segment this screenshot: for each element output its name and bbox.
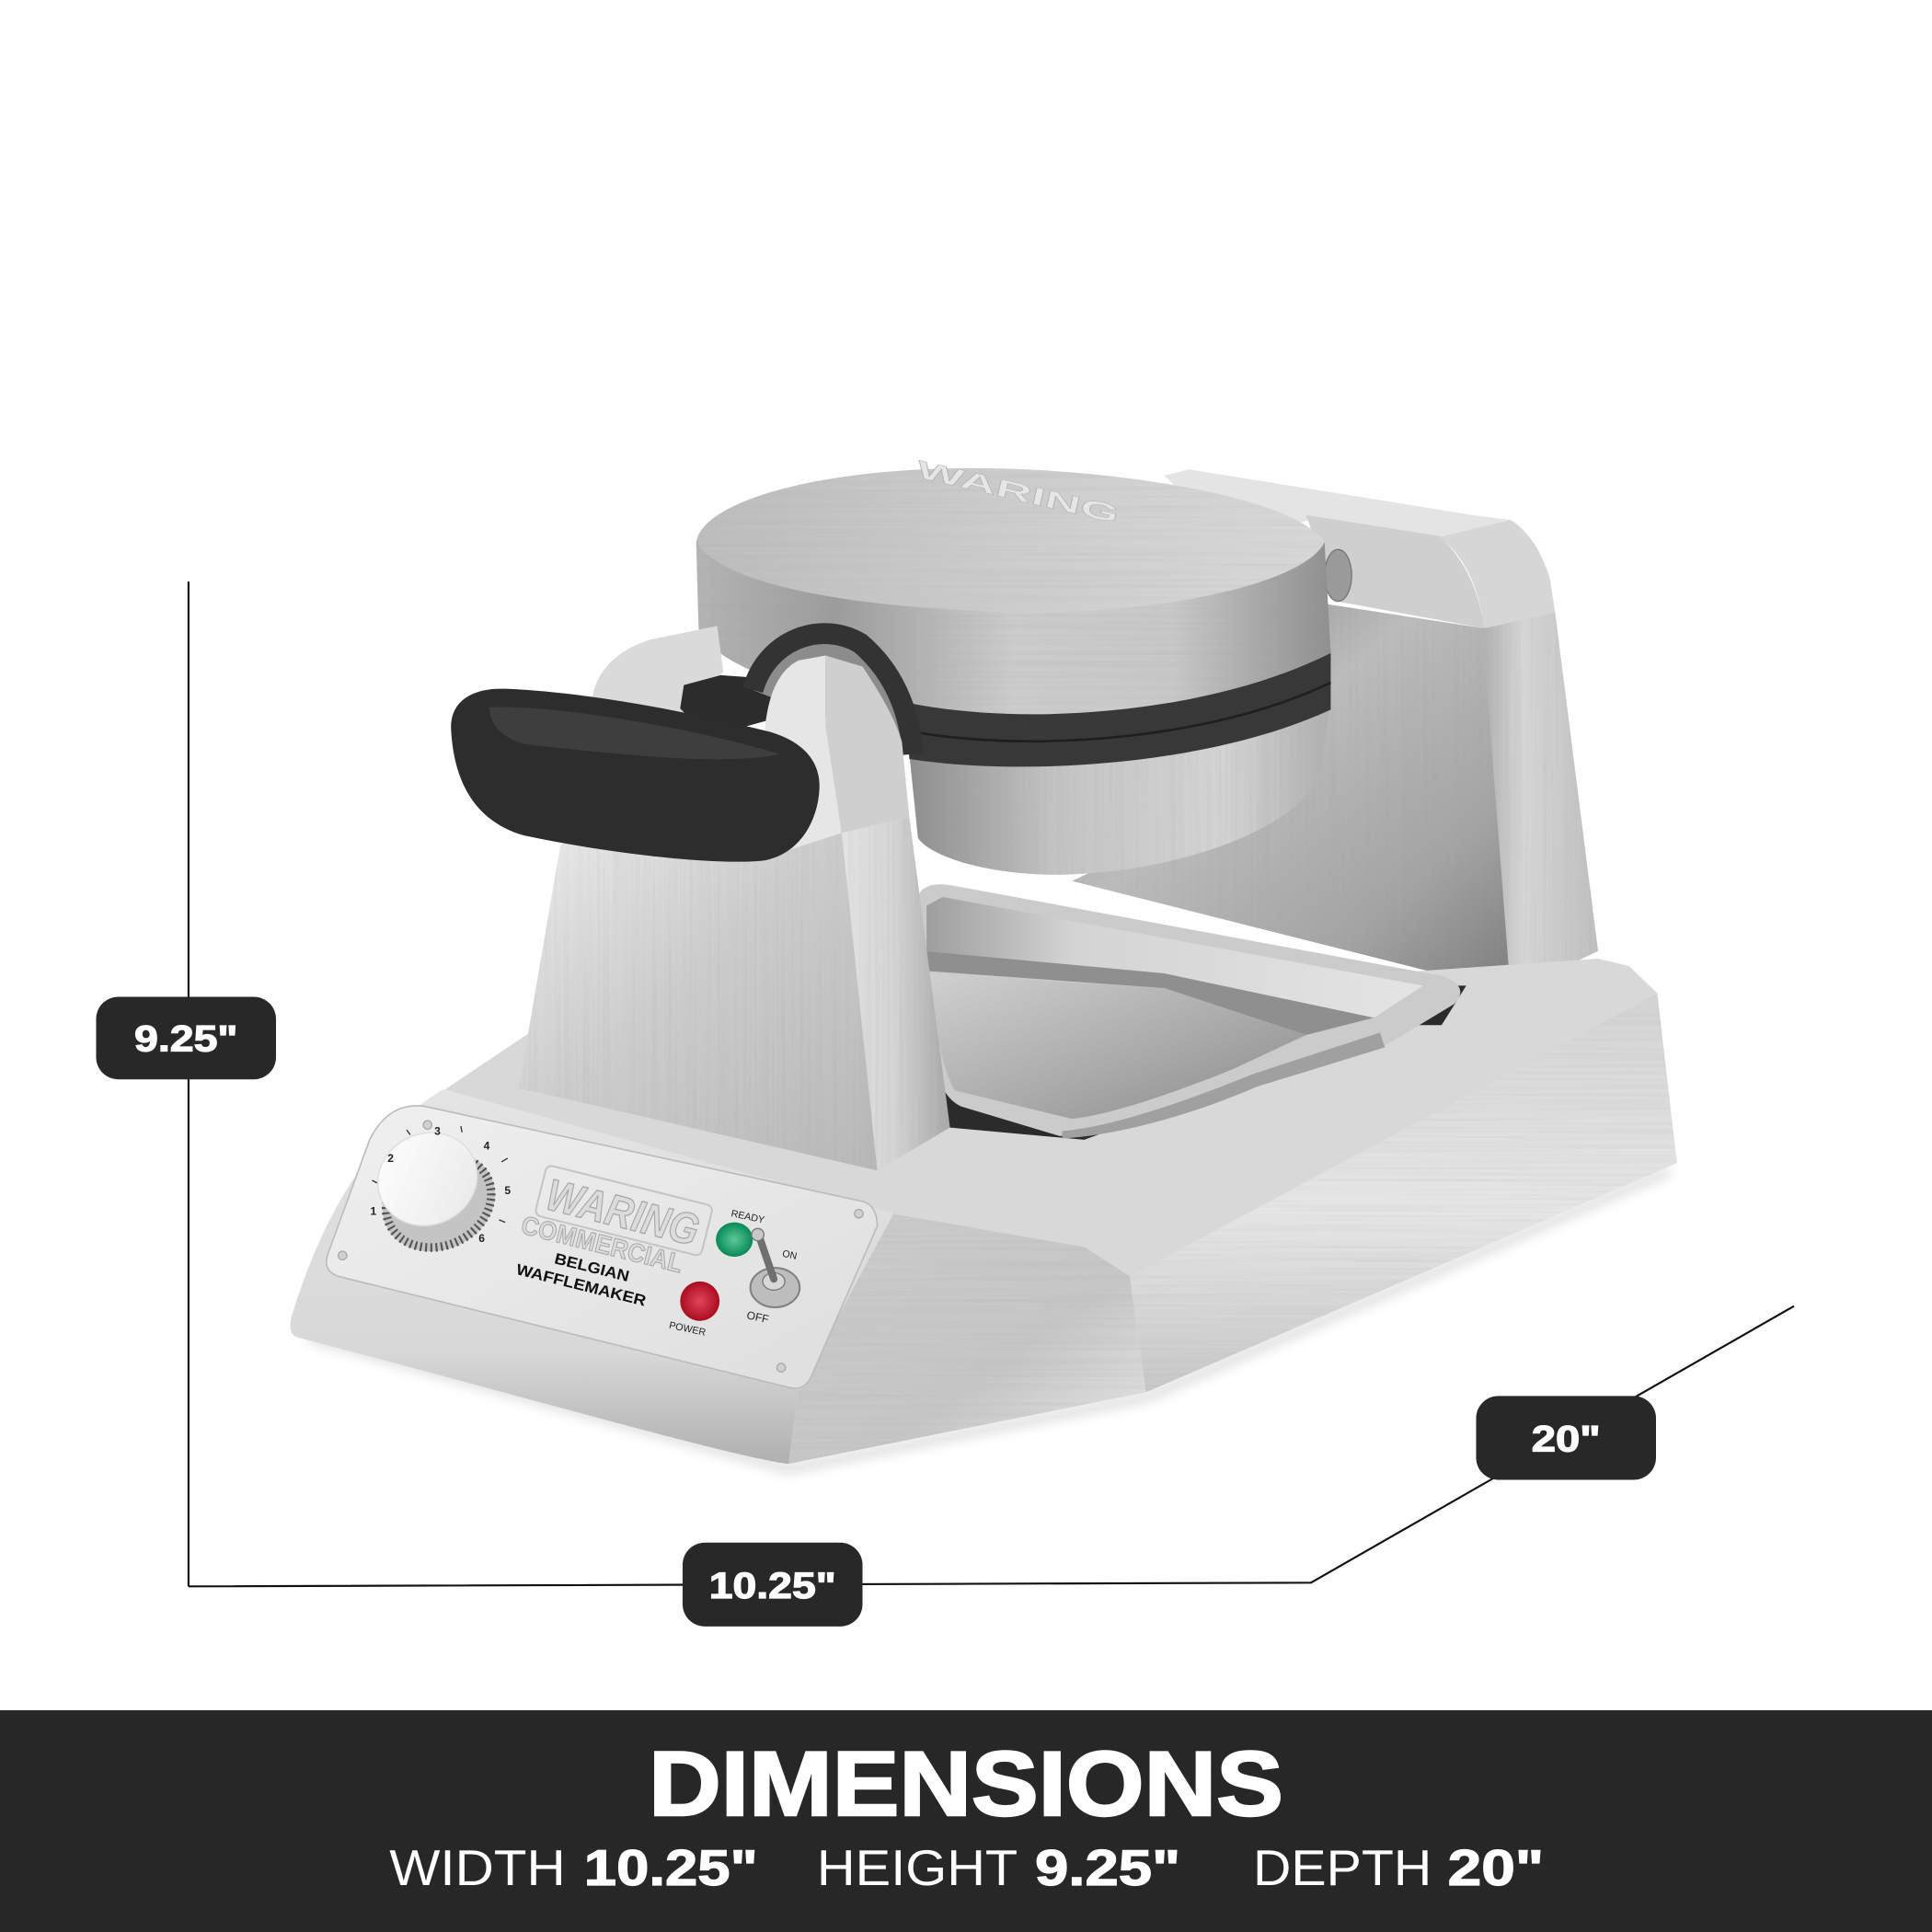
switch and light labels: POWER (668, 1320, 707, 1339)
width spec: WIDTH (389, 1839, 566, 1896)
rear post (1072, 469, 1598, 992)
rear post cap front (1306, 515, 1485, 628)
post cap side facet (825, 655, 909, 833)
height dimension line (188, 581, 190, 1586)
toggle lever (759, 1236, 774, 1279)
temperature knob (362, 1117, 512, 1270)
rear post cap corner (1439, 520, 1555, 628)
post cap face (764, 655, 842, 850)
dial tick marks (372, 1126, 508, 1223)
plate screws (339, 1121, 863, 1372)
switch and light labels: OFF (745, 1308, 770, 1326)
base shadow (308, 1170, 1670, 1468)
dial numbers: 5 (504, 1184, 511, 1197)
left back post (560, 626, 788, 863)
lower plate body (909, 707, 1329, 875)
tray handle strip (1062, 1032, 1385, 1139)
depth spec: 20" (1448, 1839, 1544, 1896)
toggle ball (752, 1228, 764, 1241)
handle arm (680, 675, 788, 737)
dark gasket bands (905, 653, 1330, 766)
dial numbers: 6 (478, 1232, 485, 1245)
hinge ring (753, 634, 913, 754)
pill: height 9.25: 9.25" (134, 1018, 237, 1059)
crumb tray (918, 884, 1466, 1140)
switch and light labels (668, 1208, 798, 1339)
tray shadow (926, 985, 1466, 1140)
tray outer rim (918, 884, 1460, 1136)
power light (680, 1282, 719, 1321)
footer heading: DIMENSIONS (649, 1733, 1283, 1835)
lid top disc (696, 468, 1325, 613)
handle inner recess (489, 707, 780, 759)
dial numbers (370, 1124, 511, 1245)
switch and light labels: READY (730, 1208, 765, 1226)
lid side (696, 542, 1330, 715)
dial numbers: 1 (370, 1205, 376, 1218)
depth spec (1253, 1839, 1544, 1896)
black handle (451, 689, 820, 862)
Wafflemaker label: WAFFLEMAKER (514, 1260, 648, 1310)
height spec: HEIGHT (817, 1839, 1018, 1896)
embossed Waring Commercial logo (519, 1162, 713, 1282)
hinge bolt (1325, 549, 1351, 602)
toggle collar (763, 1272, 785, 1290)
ready light (716, 1223, 753, 1257)
front post (519, 655, 950, 1170)
plate body (327, 1106, 878, 1388)
logo COMMERCIAL: COMMERCIAL (519, 1211, 685, 1278)
pill: width 10.25: 10.25" (709, 1565, 836, 1606)
lid logo: WARING (914, 455, 1121, 529)
Belgian label: BELGIAN (553, 1249, 631, 1285)
product name (514, 1241, 652, 1310)
post front face (519, 825, 878, 1170)
tray floor (926, 973, 1306, 1119)
width spec: 10.25" (584, 1839, 758, 1896)
gasket split line (907, 683, 1330, 742)
height spec (817, 1839, 1180, 1896)
base (291, 959, 1677, 1464)
dial numbers: 4 (484, 1140, 490, 1153)
pill: height 9.25 (96, 996, 276, 1079)
dial numbers: 2 (387, 1152, 394, 1165)
footer band (0, 1710, 1932, 1932)
tray back wall (926, 897, 1423, 1018)
product: waffle maker (291, 455, 1677, 1468)
post side face (842, 817, 950, 1170)
base front lip (291, 1089, 893, 1464)
base top surface (443, 959, 1657, 1279)
base right face (1130, 993, 1677, 1392)
height spec: 9.25" (1035, 1839, 1180, 1896)
knob top (362, 1117, 492, 1242)
pill: width 10.25 (683, 1543, 863, 1627)
knob ridges (371, 1138, 507, 1264)
tray inner ledge (926, 951, 1374, 1035)
toggle nut (751, 1268, 799, 1307)
pill: depth 20 (1476, 1396, 1656, 1479)
toggle switch (751, 1228, 799, 1307)
rear panel (1072, 604, 1511, 992)
pill: depth 20: 20" (1532, 1419, 1601, 1460)
base corner facet (788, 1213, 1146, 1464)
logo frame (535, 1165, 713, 1257)
width and depth dimension line (189, 1306, 1794, 1586)
rear post cap top (1165, 469, 1511, 542)
width spec (389, 1839, 758, 1896)
control plate (327, 1106, 878, 1388)
dial numbers: 3 (434, 1124, 441, 1137)
switch and light labels: ON (781, 1248, 798, 1262)
rear post side (1482, 611, 1598, 992)
logo WARING: WARING (541, 1170, 704, 1256)
waffle drum (696, 455, 1330, 875)
handle outer (451, 689, 820, 862)
knob body (366, 1133, 512, 1270)
depth spec: DEPTH (1253, 1839, 1432, 1896)
